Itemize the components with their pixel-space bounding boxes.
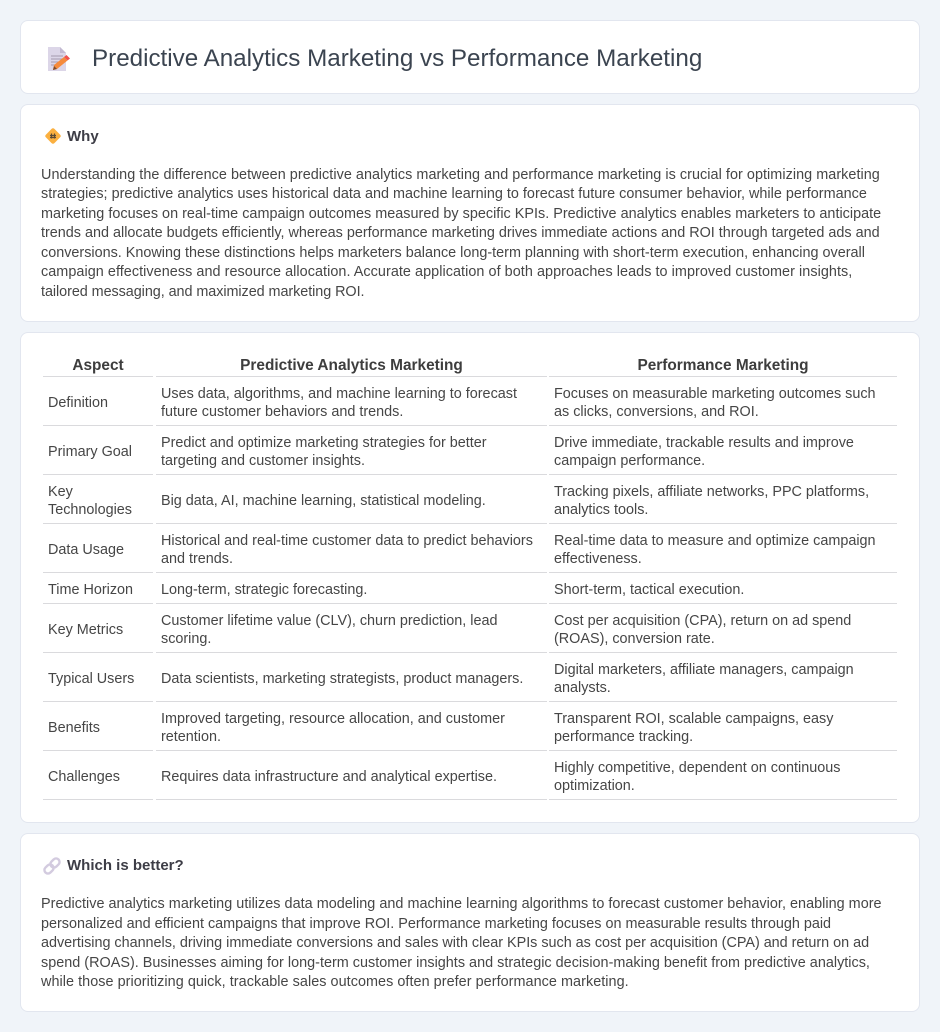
table: comparison: analytics tools.	[554, 502, 648, 518]
table: comparison: Predictive Analytics Marketing	[240, 357, 463, 374]
text block: why paragraph: Understanding the difference between predictive analytics marketing and performance marketing is crucial for optimizing marketing	[41, 167, 880, 183]
table: comparison: retention.	[161, 729, 221, 745]
row: typical users: Typical Users	[48, 671, 134, 687]
text block: which is better paragraph: advertising channels, driving immediate conversions and sales with clear KPIs such as cost per acquisition (CPA) and return on ad	[41, 935, 869, 951]
icon: link	[43, 857, 61, 875]
row: key technologies: Key	[48, 484, 73, 500]
text block: why paragraph: conversions. Knowing these distinctions helps marketers balance long-term planning with short-term execution, enhancing overall	[41, 245, 865, 261]
table: comparison: Cost per acquisition (CPA), return on ad spend	[554, 613, 851, 629]
row: data usage: Data Usage	[48, 542, 124, 558]
table: comparison: Uses data, algorithms, and machine learning to forecast	[161, 386, 517, 402]
table: comparison: Focuses on measurable marketing outcomes such	[554, 386, 876, 402]
table: comparison: and trends.	[161, 551, 233, 567]
table: comparison: Requires data infrastructure and analytical expertise.	[161, 769, 497, 785]
table: comparison: as clicks, conversions, and ROI.	[554, 404, 759, 420]
table: comparison: Short-term, tactical execution.	[554, 582, 744, 598]
table: comparison: Highly competitive, dependent on continuous	[554, 760, 840, 776]
table: comparison: Long-term, strategic forecasting.	[161, 582, 367, 598]
table: comparison: Digital marketers, affiliate managers, campaign	[554, 662, 854, 678]
text block: why paragraph: campaign effectiveness and resource allocation. Accurate application of both approaches leads to improved customer insights,	[41, 264, 852, 280]
table: comparison: (ROAS), conversion rate.	[554, 631, 715, 647]
row: definition: Definition	[48, 395, 108, 411]
table: comparison: analysts.	[554, 680, 611, 696]
text block: which is better paragraph: spend (ROAS). Businesses aiming for long-term customer insights and strategic decision-making benefit from predictive analytics,	[41, 955, 870, 971]
table: comparison: effectiveness.	[554, 551, 642, 567]
row: key metrics: Key Metrics	[48, 622, 123, 638]
table: comparison: performance tracking.	[554, 729, 693, 745]
table: comparison: Historical and real-time customer data to predict behaviors	[161, 533, 533, 549]
row: challenges: Challenges	[48, 769, 120, 785]
text block: which is better paragraph: while those prioritizing quick, trackable sales outcomes often prefer performance marketing.	[41, 974, 629, 990]
table header	[43, 355, 897, 378]
table: comparison: future customer behaviors and trends.	[161, 404, 403, 420]
row: primary goal: Primary Goal	[48, 444, 132, 460]
title: Predictive Analytics Marketing vs Performance Marketing	[92, 45, 702, 72]
table: comparison: Data scientists, marketing strategists, product managers.	[161, 671, 523, 687]
table: comparison: Real-time data to measure and optimize campaign	[554, 533, 876, 549]
panel: comparison table	[20, 332, 920, 823]
table: comparison: campaign performance.	[554, 453, 705, 469]
table: comparison: Big data, AI, machine learning, statistical modeling.	[161, 493, 486, 509]
table: comparison: Performance Marketing	[637, 357, 809, 374]
table: comparison: Tracking pixels, affiliate networks, PPC platforms,	[554, 484, 869, 500]
text block: why paragraph: marketing focuses on real-time campaign outcomes measured by specific KPIs. Predictive analytics enables marketers to anticipate	[41, 206, 881, 222]
table: comparison: scoring.	[161, 631, 211, 647]
table: comparison: optimization.	[554, 778, 635, 794]
table: comparison: Customer lifetime value (CLV), churn prediction, lead	[161, 613, 497, 629]
table: comparison: Improved targeting, resource allocation, and customer	[161, 711, 505, 727]
table: comparison: Predict and optimize marketing strategies for better	[161, 435, 487, 451]
heading: which is better: Which is better?	[67, 857, 184, 874]
table: comparison: Drive immediate, trackable results and improve	[554, 435, 854, 451]
panel: title header	[20, 20, 920, 94]
table: comparison: targeting and customer insights.	[161, 453, 365, 469]
text block: which is better paragraph: personalized and efficient campaigns that improve ROI. Performance marketing focuses on measurable results through paid	[41, 916, 831, 932]
panel: which is better	[20, 833, 920, 1012]
table: comparison: Aspect	[72, 357, 124, 374]
panel: why	[20, 104, 920, 322]
text block: why paragraph: strategies; predictive analytics uses historical data and machine learning to forecast future consumer behavior, while performance	[41, 186, 867, 202]
text block: why paragraph	[41, 167, 881, 300]
row: time horizon: Time Horizon	[48, 582, 133, 598]
table: comparison: Technologies	[48, 502, 132, 518]
text block: why paragraph: tailored messaging, and maximized marketing ROI.	[41, 284, 364, 300]
text block: why paragraph: trends and allocate budgets efficiently, whereas performance marketing drives immediate actions and ROI through targeted ads and	[41, 225, 880, 241]
row: benefits: Benefits	[48, 720, 100, 736]
icon: document with pencil	[48, 47, 70, 71]
text block: which is better paragraph: Predictive analytics marketing utilizes data modeling and machine learning algorithms to forecast customer behavior, enabling more	[41, 896, 882, 912]
icon: warning diamond	[45, 128, 61, 144]
heading: why: Why	[67, 128, 99, 145]
table: comparison: Transparent ROI, scalable campaigns, easy	[554, 711, 833, 727]
text block: which is better paragraph	[41, 896, 882, 990]
